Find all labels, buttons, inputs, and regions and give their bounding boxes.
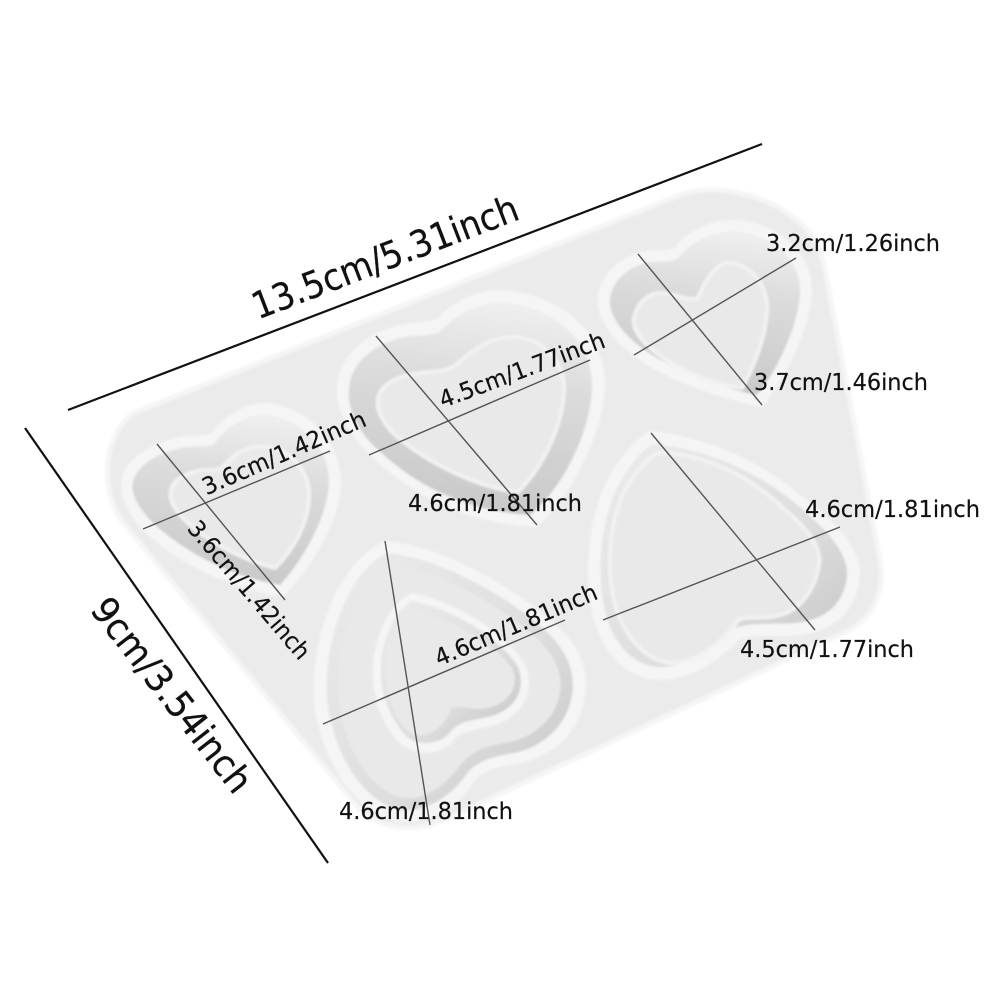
- label: bottom centre heart width: 4.6cm/1.81inch: [430, 578, 602, 672]
- dimension line: tray length: [68, 144, 762, 410]
- measure lines: top centre heart: [369, 336, 590, 525]
- label: bottom centre heart height: 4.6cm/1.81inch: [339, 797, 513, 825]
- measure lines: lower right heart: [603, 433, 840, 630]
- label: lower right heart width: 4.6cm/1.81inch: [805, 495, 980, 523]
- panel: silicone mold tray: [107, 190, 881, 828]
- label: top right heart width: 3.2cm/1.26inch: [766, 229, 940, 257]
- heart cavity: bottom centre, double ring: [314, 541, 586, 822]
- label: top centre heart height: 4.6cm/1.81inch: [408, 489, 582, 517]
- heart cavity: lower right: [588, 431, 860, 680]
- label: tray width: 9cm/3.54inch: [82, 589, 261, 802]
- heart cavity: top centre: [337, 290, 605, 527]
- heart cavity: top right: [598, 220, 812, 407]
- label: top centre heart width: 4.5cm/1.77inch: [435, 326, 609, 414]
- label: left heart height: 3.6cm/1.42inch: [182, 515, 316, 665]
- heart cavity: left: [121, 403, 341, 597]
- label: left heart width: 3.6cm/1.42inch: [198, 405, 370, 501]
- label: tray length: 13.5cm/5.31inch: [246, 187, 525, 328]
- measure lines: left heart: [143, 444, 330, 600]
- dimension line: tray width: [25, 428, 328, 863]
- label: lower right heart height: 4.5cm/1.77inch: [740, 635, 914, 663]
- measure lines: top right heart: [634, 254, 796, 405]
- label: top right heart height: 3.7cm/1.46inch: [754, 368, 928, 396]
- measure lines: bottom centre heart: [323, 541, 565, 825]
